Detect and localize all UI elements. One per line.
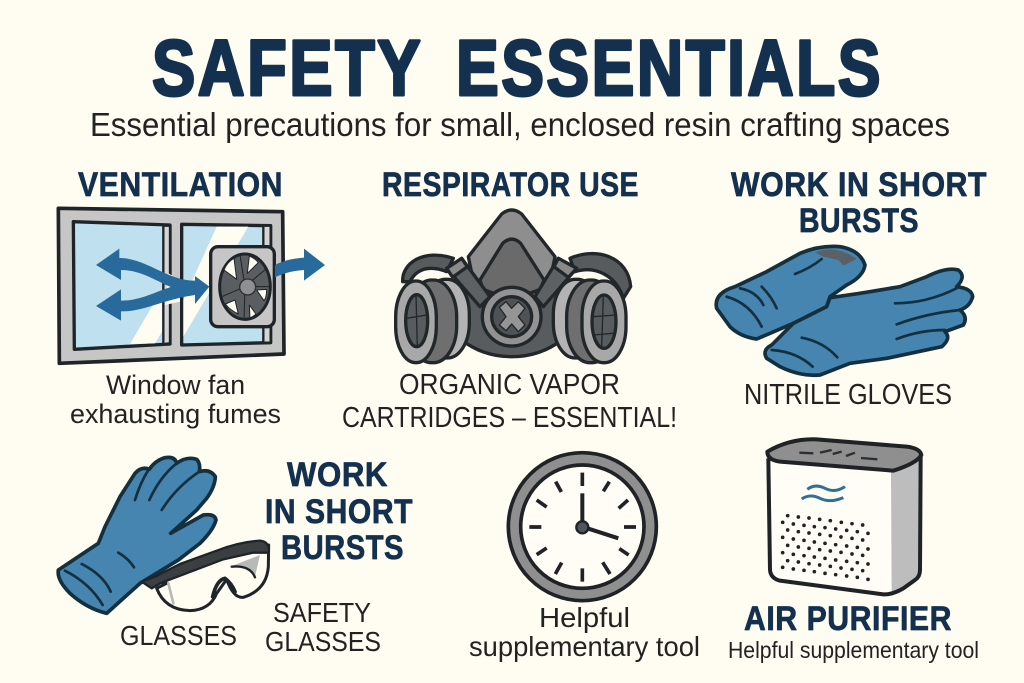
icon: respirator mask: [396, 210, 631, 363]
heading: respirator use: RESPIRATOR USE: [382, 166, 639, 204]
panel: air purifier: [728, 439, 979, 663]
heading: work in short bursts: BURSTS: [799, 202, 919, 240]
title: ESSENTIALS: [456, 23, 883, 112]
heading: work in short bursts: BURSTS: [281, 529, 404, 567]
panel: safety glasses: [58, 456, 413, 657]
caption: organic vapor cartridges: [342, 369, 677, 434]
caption: window fan: [70, 370, 281, 429]
caption: safety glasses: SAFETY: [273, 597, 371, 628]
caption: helpful supplementary tool: supplementary tool: [469, 631, 700, 662]
icon: air purifier: [767, 439, 921, 594]
heading: work in short bursts: [731, 166, 987, 240]
heading: work in short bursts: IN SHORT: [265, 493, 413, 531]
caption: helpful supplementary tool: Helpful supplementary tool: [728, 637, 979, 663]
caption: organic vapor cartridges: CARTRIDGES – ESSENTIAL!: [342, 402, 677, 434]
caption: helpful supplementary tool: [469, 602, 700, 662]
panel: respirator use: [342, 166, 677, 434]
caption: window fan: exhausting fumes: [70, 399, 281, 429]
caption: safety glasses: [265, 597, 381, 657]
heading: work in short bursts: WORK: [287, 456, 388, 494]
heading: ventilation: VENTILATION: [78, 166, 283, 204]
heading: work in short bursts: WORK IN SHORT: [731, 166, 987, 204]
panel: clock: [469, 453, 700, 662]
subtitle: Essential precautions for small, enclosed resin crafting spaces: [90, 106, 950, 143]
title: [152, 23, 883, 112]
title: SAFETY: [152, 23, 423, 112]
heading: air purifier: AIR PURIFIER: [744, 600, 952, 638]
icon: nitrile gloves: [716, 246, 973, 375]
icon: wall clock: [508, 453, 656, 601]
caption: helpful supplementary tool: Helpful: [539, 602, 630, 633]
caption: nitrile gloves: NITRILE GLOVES: [744, 379, 952, 411]
caption: organic vapor cartridges: ORGANIC VAPOR: [399, 369, 620, 401]
icon: glove and safety glasses: [58, 457, 269, 613]
heading: work in short bursts: [265, 456, 413, 567]
caption: safety glasses: GLASSES: [265, 626, 381, 657]
caption: window fan: Window fan: [106, 370, 245, 400]
panel: ventilation: [58, 166, 325, 429]
caption: glasses: GLASSES: [120, 620, 237, 651]
icon: window with exhaust fan: [58, 208, 325, 363]
panel: nitrile gloves: [716, 166, 987, 411]
